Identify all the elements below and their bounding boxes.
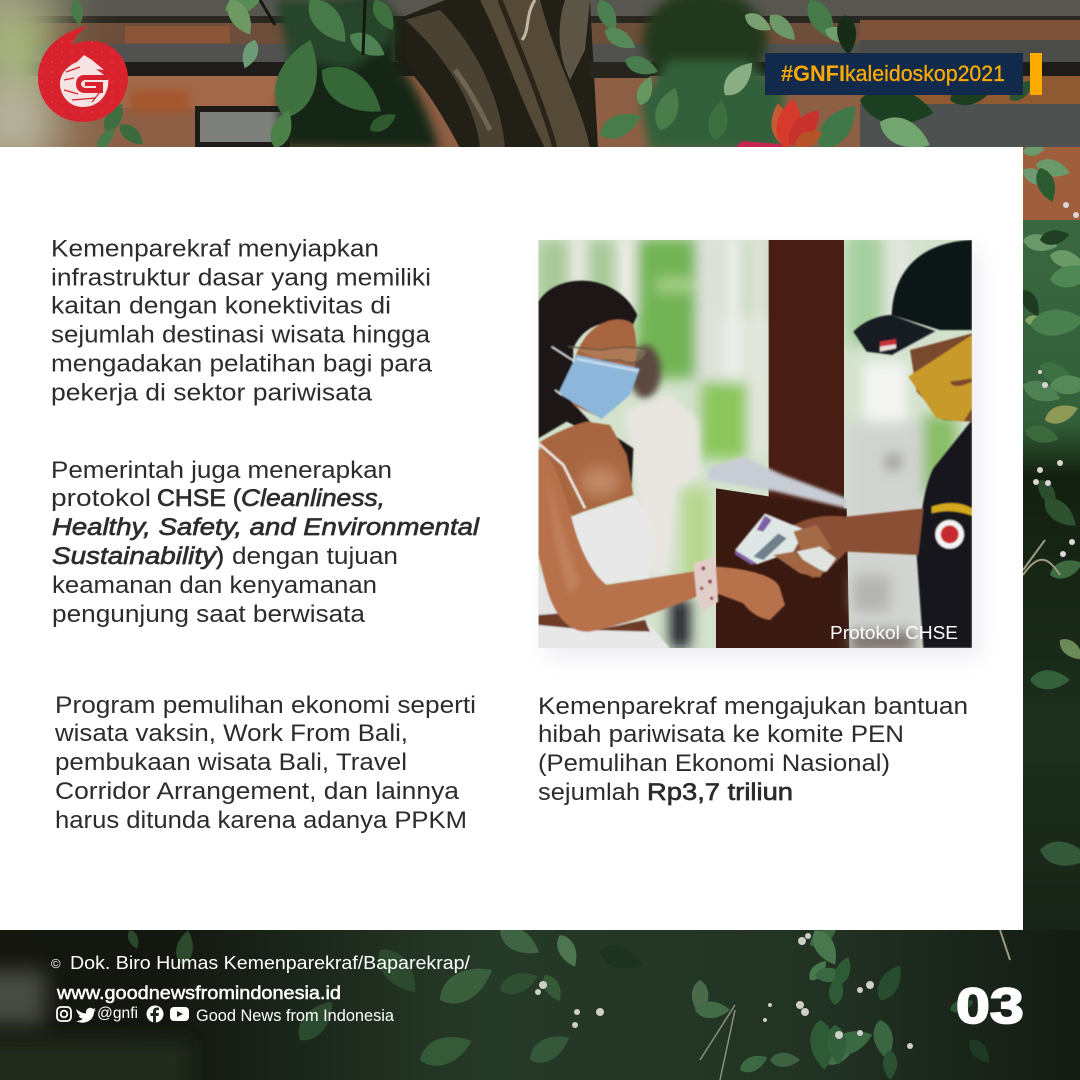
guard uniform (917, 420, 972, 648)
woman glasses (568, 347, 647, 363)
scrunchie (693, 557, 718, 612)
text block: infrastructure: infrastruktur dasar yang memiliki (51, 264, 431, 292)
text block: CHSE protocol: dengan tujuan (232, 543, 398, 570)
text block: grant: sejumlah (538, 779, 640, 806)
foliage right of trunk (590, 0, 1037, 157)
guard face (910, 333, 972, 422)
background man (625, 345, 700, 575)
brick wall top (0, 0, 1080, 147)
photo caption: Protokol CHSE (830, 623, 958, 643)
text block: recovery programs: harus ditunda karena adanya PPKM (55, 807, 467, 834)
photo shadow (546, 250, 980, 658)
icon: instagram (57, 1007, 71, 1021)
icon: twitter (76, 1008, 96, 1023)
text block: infrastructure: Kemenparekraf menyiapkan (51, 236, 379, 262)
text block: recovery programs: Corridor Arrangement, dan lainnya (55, 778, 460, 805)
text block: recovery programs: pembukaan wisata Bali, Travel (55, 749, 407, 776)
text block: CHSE protocol: ) (216, 543, 224, 570)
logo: GNFI red swirl (38, 26, 128, 122)
social media row (57, 1005, 395, 1025)
woman chest (538, 422, 633, 517)
text block: CHSE protocol: Pemerintah juga menerapkan (51, 457, 392, 484)
trunk (395, 0, 598, 148)
text block: grant: Rp3,7 triliun (647, 779, 793, 806)
text block: grant (538, 693, 968, 806)
text block: recovery programs: Program pemulihan ekonomi seperti (55, 692, 476, 719)
woman white top (572, 497, 653, 583)
page name: Good News from Indonesia (196, 1006, 395, 1025)
hashtag badge: kaleidoskop2021 (845, 61, 1005, 86)
source credit: Dok. Biro Humas Kemenparekraf/Baparekrap/ (70, 953, 470, 973)
woman arm (538, 448, 785, 632)
text block: CHSE protocol: Cleanliness, (241, 485, 385, 512)
text block: grant: (Pemulihan Ekonomi Nasional) (538, 750, 890, 777)
guard arm (773, 508, 923, 578)
panel: white content card (0, 147, 1023, 930)
hashtag badge: #GNFI (781, 61, 845, 86)
foliage top centre (69, 0, 440, 152)
website url: www.goodnewsfromindonesia.id (56, 982, 341, 1003)
red plant (736, 98, 822, 147)
woman face mask (552, 347, 640, 419)
source credit: © (51, 956, 61, 971)
text block: recovery programs: wisata vaksin, Work From Bali, (54, 720, 408, 747)
guard yellow mask (908, 335, 972, 422)
page number: 03 (956, 978, 1024, 1034)
accent bar (1030, 53, 1042, 95)
text block: infrastructure: pekerja di sektor pariwisata (51, 380, 373, 406)
woman hair (538, 281, 637, 485)
icon: facebook (146, 1006, 164, 1023)
logo emblem (60, 55, 108, 107)
blurred garden (538, 235, 957, 655)
text block: infrastructure: mengadakan pelatihan bagi para (51, 350, 433, 378)
woman face (573, 319, 636, 418)
grey shapes (850, 455, 913, 652)
text block: infrastructure (51, 236, 433, 406)
text block: recovery programs (54, 692, 476, 834)
text block: CHSE protocol: protokol (51, 485, 151, 512)
blurred counter object (708, 457, 847, 508)
hashtag badge (765, 53, 1023, 95)
text block: CHSE protocol: Sustainability (52, 543, 218, 570)
text block: CHSE protocol: CHSE ( (157, 485, 241, 512)
thermometer (735, 513, 836, 578)
handle: @gnfi (97, 1005, 138, 1022)
blurred left foliage (0, 0, 96, 147)
text block: CHSE protocol (51, 457, 480, 628)
text block: infrastructure: kaitan dengan konektivitas di (51, 292, 391, 320)
text block: CHSE protocol: keamanan dan kenyamanan (52, 572, 377, 599)
photo: CHSE temperature check (538, 235, 972, 655)
text block: grant: hibah pariwisata ke komite PEN (538, 721, 904, 748)
text block: infrastructure: sejumlah destinasi wisata hingga (51, 322, 431, 348)
text block: CHSE protocol: pengunjung saat berwisata (52, 601, 366, 628)
icon: youtube (170, 1007, 189, 1021)
text block: CHSE protocol: Healthy, Safety, and Environmental (52, 514, 480, 541)
right side strip (1023, 147, 1080, 866)
bottom foliage (0, 921, 1080, 1080)
brown pillar (769, 240, 844, 513)
guard cap (853, 240, 972, 355)
text block: grant: Kemenparekraf mengajukan bantuan (538, 693, 968, 720)
